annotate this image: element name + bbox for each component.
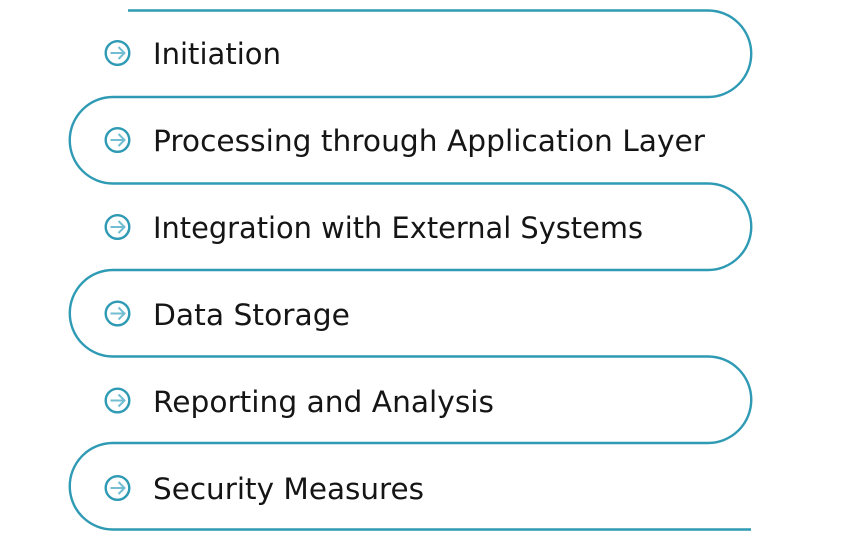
step 1: Initiation xyxy=(106,37,281,71)
step 6: Security Measures xyxy=(106,472,424,506)
icon: arrow circle 6 xyxy=(106,476,129,500)
step 5: Reporting and Analysis xyxy=(106,385,494,419)
serpentine flow line xyxy=(70,10,751,530)
step 3: Integration with External Systems xyxy=(106,211,643,245)
label: Integration with External Systems: Integration with External Systems xyxy=(153,211,643,245)
step 2: Processing through Application Layer xyxy=(106,124,706,158)
label: Reporting and Analysis: Reporting and Analysis xyxy=(153,385,494,419)
label: Security Measures: Security Measures xyxy=(153,472,424,506)
icon: arrow circle 5 xyxy=(106,389,129,412)
step 4: Data Storage xyxy=(106,298,350,332)
icon: arrow circle 2 xyxy=(106,128,129,152)
label: Initiation: Initiation xyxy=(153,37,281,71)
label: Data Storage: Data Storage xyxy=(153,298,350,332)
icon: arrow circle 3 xyxy=(106,215,129,239)
icon: arrow circle 4 xyxy=(106,302,129,325)
icon: arrow circle 1 xyxy=(106,41,129,65)
label: Processing through Application Layer: Processing through Application Layer xyxy=(153,124,706,158)
